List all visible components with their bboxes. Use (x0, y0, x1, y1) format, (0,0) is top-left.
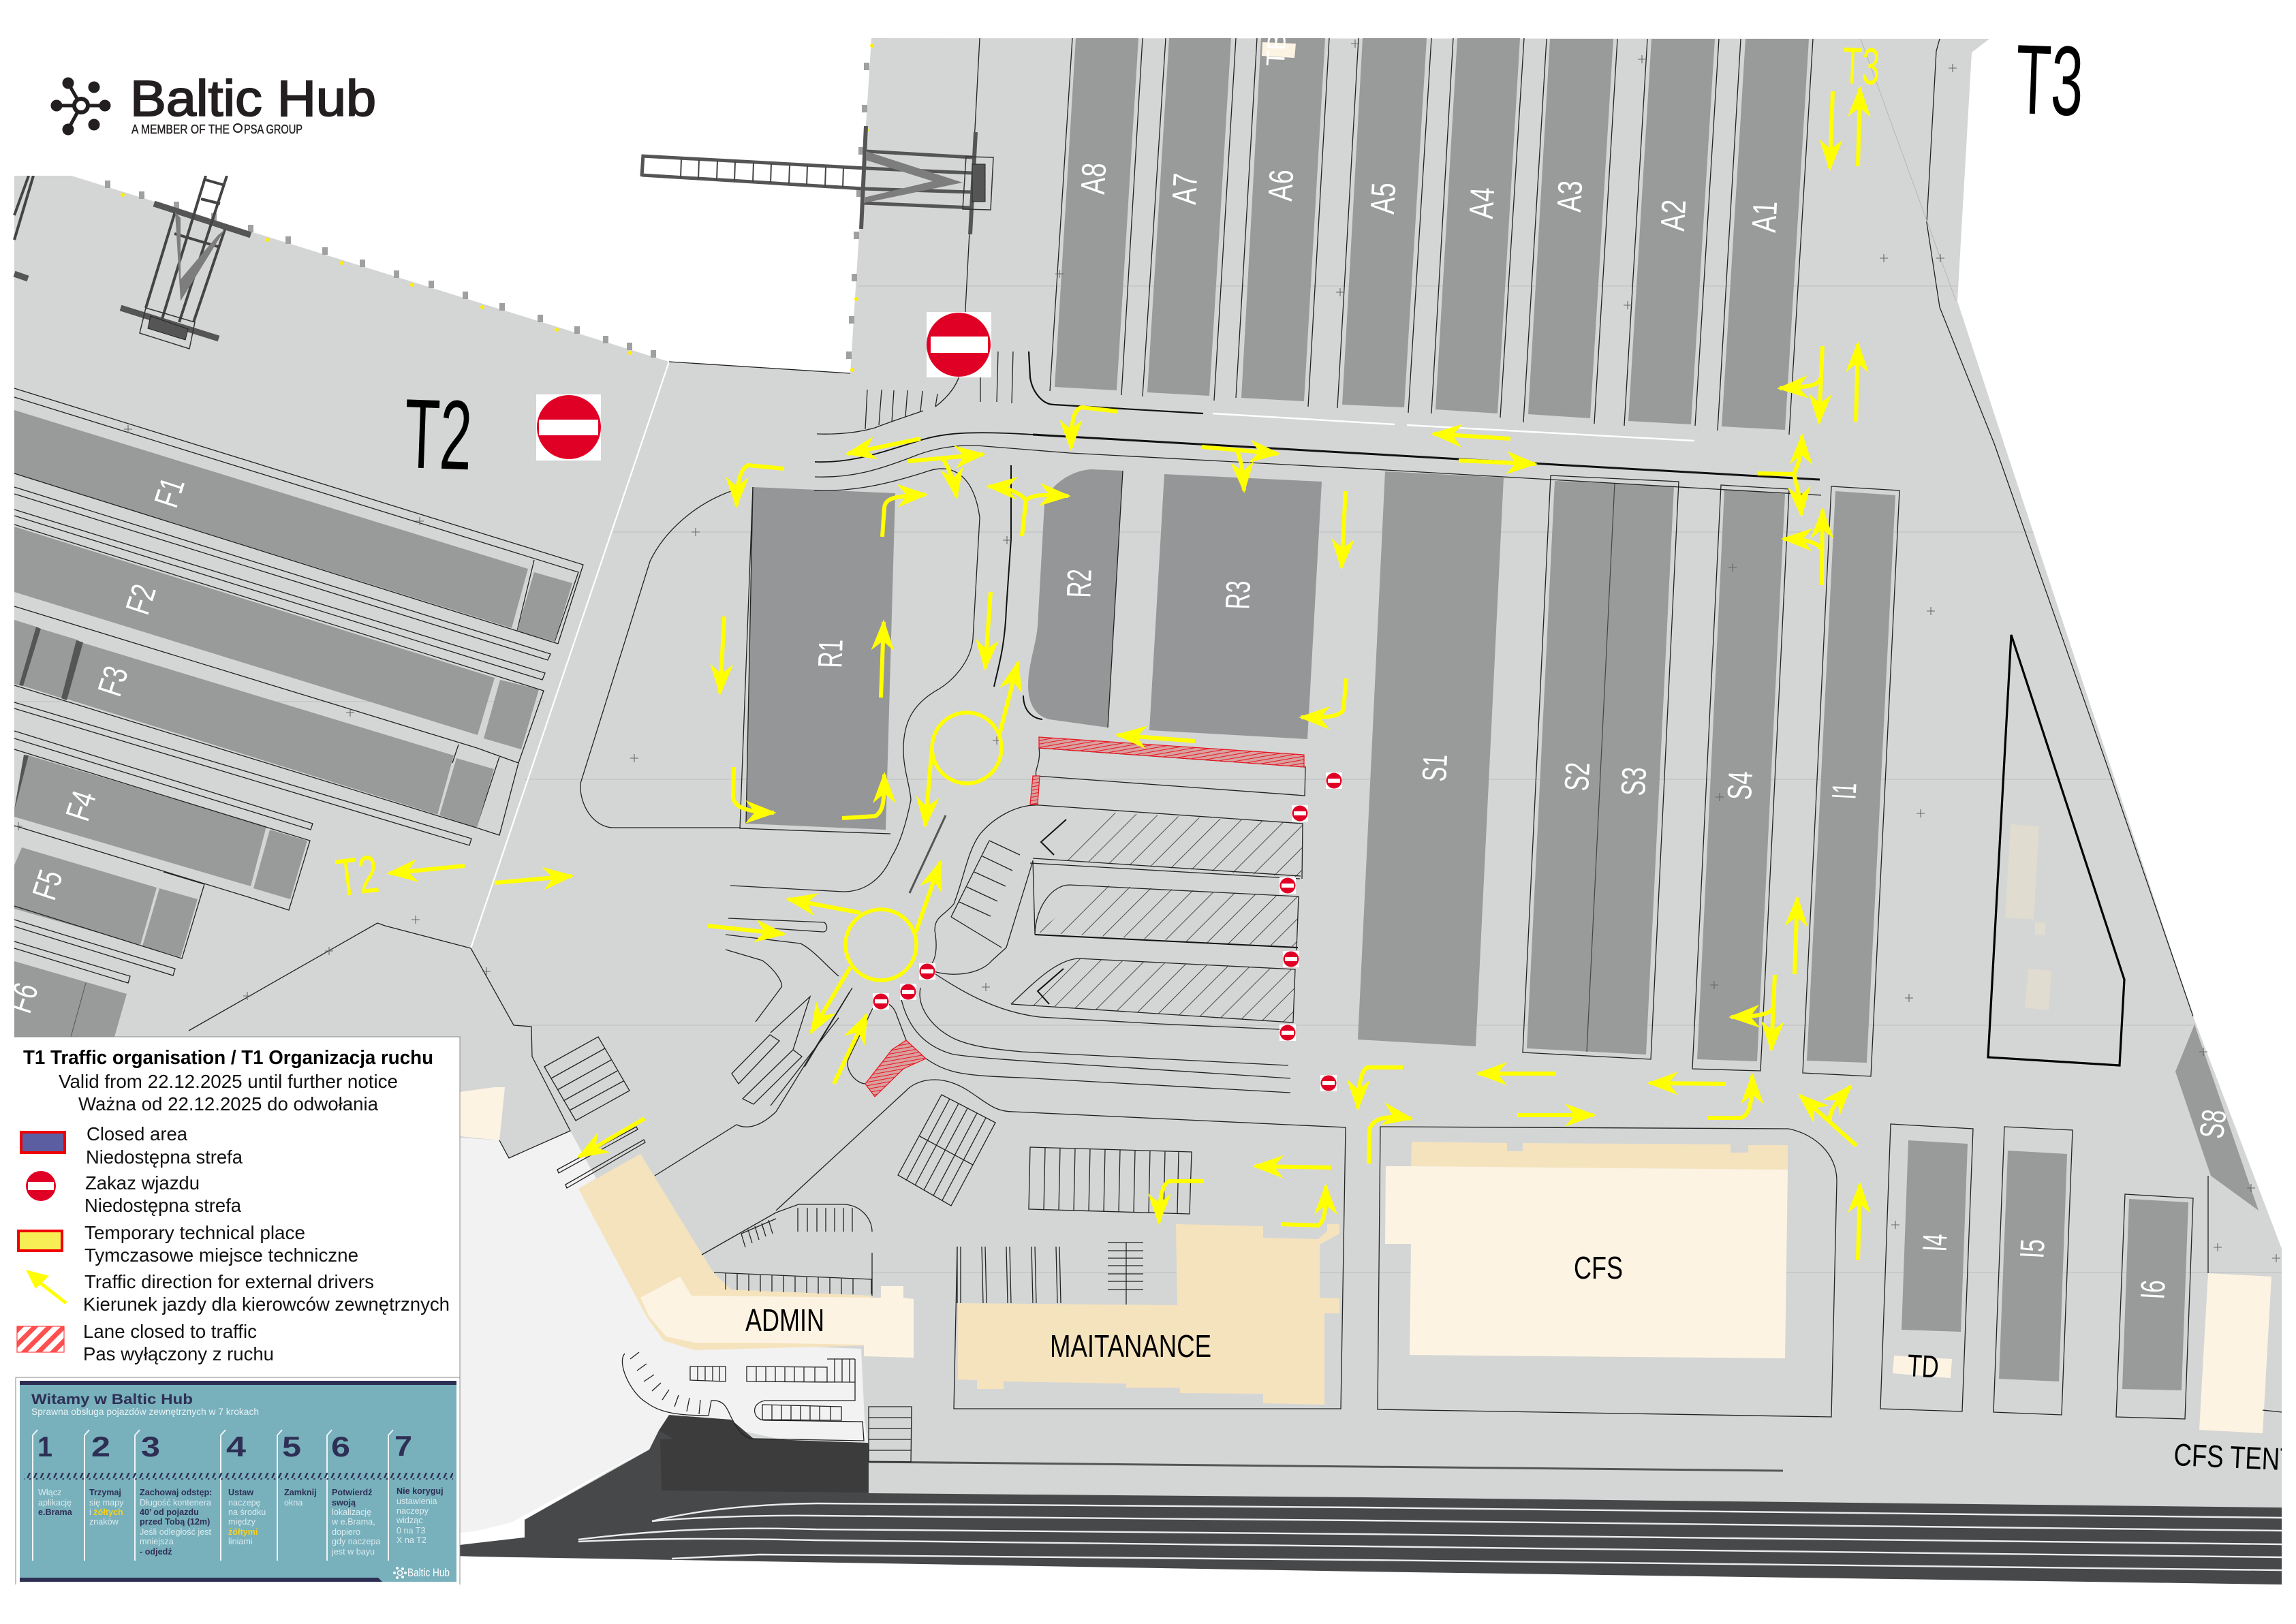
legend text: traffic direction: Traffic direction for external drivers (84, 1271, 374, 1292)
traffic direction arrows (389, 89, 1860, 1260)
block labels (1, 162, 2233, 1300)
TB marker: TB (1262, 33, 1292, 67)
terminal label T3: T3 (2014, 24, 2085, 136)
step numbers: 6 (331, 1431, 350, 1463)
building label CFS: CFS (1574, 1250, 1623, 1285)
rail yard (460, 1415, 2282, 1584)
block labels: F6 (1, 978, 46, 1017)
legend icon: no entry (26, 1171, 56, 1201)
terminal label T2: T2 (403, 378, 474, 490)
legend text: no entry: Zakaz wjazdu (85, 1172, 200, 1193)
tile seams (14, 286, 2282, 1272)
step 7 text: Nie koryguj (397, 1486, 444, 1496)
block labels: F1 (147, 473, 192, 512)
step 2 text: się mapy (89, 1498, 124, 1508)
step 3 text: 40’ od pojazdu (140, 1508, 199, 1517)
step dividers (33, 1430, 393, 1561)
block rows A (1050, 38, 1813, 435)
block labels: R2 (1059, 568, 1099, 598)
block labels: A2 (1654, 199, 1693, 232)
logo tagline: PSA GROUP (244, 123, 302, 136)
sign: quay no entry (927, 312, 991, 377)
roundabouts (846, 713, 1002, 980)
legend text: temporary technical place: Temporary technical place (84, 1222, 305, 1243)
block labels: F2 (119, 580, 164, 619)
legend text: no entry: Niedostępna strefa (84, 1195, 241, 1216)
step 2 text: i (89, 1508, 93, 1517)
step 6 text: w e.Brama, (331, 1517, 375, 1527)
block labels: S2 (1557, 762, 1597, 792)
step 4 text: na środku (228, 1508, 266, 1517)
step 4 text: liniami (228, 1537, 253, 1546)
step 4 text: Ustaw (228, 1488, 253, 1497)
legend text: lane closed: Lane closed to traffic (83, 1321, 257, 1342)
footer Baltic Hub logo: Baltic Hub (407, 1566, 450, 1579)
building: CFS top band (1411, 1142, 1788, 1170)
step numbers: 4 (226, 1431, 247, 1463)
yellow T3 label: T3 (1842, 37, 1880, 96)
step 6 text: dopiero (332, 1527, 360, 1537)
building: TD (1893, 1356, 1952, 1378)
block labels: I1 (1825, 782, 1864, 800)
block labels: R1 (811, 638, 850, 668)
crane: T1 quay (642, 126, 993, 234)
step 6 text: jest w bayu (331, 1547, 375, 1557)
logo tagline: A MEMBER OF THE (131, 123, 230, 136)
block labels: S3 (1614, 766, 1654, 797)
building: admin (640, 1277, 914, 1358)
small no entry signs (873, 772, 1342, 1091)
yellow T2 label: T2 (332, 843, 382, 908)
building: triangle sheds (2005, 824, 2051, 1010)
block labels: A1 (1745, 200, 1784, 234)
building: CFS tent (2199, 1273, 2271, 1433)
crane: T2 quay (14, 176, 251, 349)
legend panel (14, 1037, 460, 1585)
block labels: A7 (1165, 172, 1205, 206)
step 5 text: Zamknij (284, 1488, 317, 1497)
building: admin wing (578, 1154, 871, 1350)
quay bollards (105, 44, 874, 372)
logo tagline (131, 123, 302, 136)
step 3 text: Jeśli odległość jest (140, 1527, 212, 1537)
step 3 text: mniejsza (140, 1537, 174, 1546)
step 4 text: naczepę (228, 1498, 261, 1508)
step 7 text: naczepy (397, 1506, 429, 1516)
block labels: R3 (1218, 580, 1258, 610)
step 1 text: e.Brama (38, 1508, 73, 1517)
closed lanes hatched (865, 737, 1304, 1097)
block labels: A6 (1261, 169, 1301, 202)
step 1 text: Włącz (38, 1488, 61, 1497)
block labels: F5 (25, 865, 70, 904)
legend text: closed area: Niedostępna strefa (86, 1146, 243, 1168)
step numbers (37, 1430, 412, 1463)
legend icon: lane closed (17, 1326, 64, 1352)
step 3 text: Zachowaj odstęp: (140, 1488, 212, 1497)
sign: T2 no entry (536, 394, 601, 460)
step 1 text: aplikację (38, 1498, 72, 1508)
light poles (14, 40, 2280, 1262)
building label ADMIN: ADMIN (745, 1302, 824, 1338)
step 3 text: przed Tobą (12m) (140, 1517, 210, 1527)
step 2 text: znaków (89, 1517, 119, 1527)
legend text: lane closed: Pas wyłączony z ruchu (83, 1343, 274, 1364)
legend text: temporary technical place: Tymczasowe miejsce techniczne (84, 1245, 358, 1266)
legend text: closed area: Closed area (87, 1123, 187, 1144)
legend title: T1 Traffic organisation / T1 Organizacja ruchu (23, 1047, 433, 1069)
step 2 text: Trzymaj (89, 1488, 121, 1497)
block labels: F3 (91, 661, 136, 700)
block labels: I4 (1915, 1233, 1955, 1253)
triangle zone (1988, 635, 2124, 1065)
light apron area (460, 1131, 868, 1533)
no entry signs (536, 312, 1342, 1091)
step numbers: 2 (91, 1431, 110, 1463)
block rows S and I (1358, 471, 2259, 1419)
buildings (460, 824, 2271, 1433)
steps subtitle: Sprawna obsługa pojazdów zewnętrznych w 7 krokach (31, 1406, 259, 1417)
step 3 text: - odjedź (140, 1547, 172, 1557)
legend icon: closed area (21, 1132, 65, 1153)
step 6 text: swoją (332, 1498, 356, 1508)
step 4 text: między (228, 1517, 256, 1527)
building: maintenance (958, 1224, 1339, 1405)
building label TD: TD (1906, 1347, 1940, 1384)
step 3 text: Długość kontenera (140, 1498, 211, 1508)
block labels: S4 (1720, 770, 1760, 801)
building label MAITANANCE: MAITANANCE (1050, 1328, 1211, 1364)
step 7 text: X na T2 (397, 1535, 426, 1545)
block labels: A4 (1462, 187, 1502, 220)
legend validity EN: Valid from 22.12.2025 until further notice (59, 1071, 398, 1092)
step 6 text: Potwierdź (332, 1488, 372, 1497)
footer Baltic Hub logo (393, 1566, 450, 1579)
logo panel (14, 40, 412, 176)
legend validity PL: Ważna od 22.12.2025 do odwołania (78, 1093, 378, 1114)
white sliver (460, 1448, 649, 1545)
dashed road band (24, 1473, 453, 1480)
step 4 text: żółtymi (228, 1527, 258, 1537)
steps panel (20, 1381, 456, 1582)
step numbers: 1 (37, 1431, 52, 1463)
block labels: A8 (1074, 162, 1113, 196)
icon: Baltic Hub mark (51, 78, 110, 135)
block labels: S8 (2192, 1108, 2233, 1140)
step 7 text: widząc (396, 1516, 422, 1525)
step 7 text: 0 na T3 (397, 1526, 425, 1535)
building: terminal gate beige (460, 1087, 505, 1140)
block rows F (14, 388, 583, 1037)
block labels: I5 (2013, 1238, 2052, 1260)
block labels: S1 (1415, 753, 1455, 783)
block rows R (746, 469, 1322, 830)
building: CFS (1385, 1166, 1788, 1358)
logo wordmark: Baltic Hub (130, 70, 376, 127)
legend icon: traffic arrow (26, 1270, 66, 1303)
step 5 text: okna (284, 1498, 302, 1508)
step 6 text: gdy naczepa (332, 1537, 380, 1546)
block labels: I6 (2133, 1279, 2173, 1300)
parking bays (544, 812, 1303, 1462)
block labels: F4 (59, 786, 104, 825)
block labels: A5 (1363, 182, 1403, 215)
legend text: traffic direction: Kierunek jazdy dla kierowców zewnętrznych (83, 1294, 450, 1315)
step 2 text: żółtych (93, 1508, 123, 1517)
step numbers: 5 (282, 1431, 301, 1463)
steps title: Witamy w Baltic Hub (31, 1392, 193, 1407)
step 6 text: lokalizację (332, 1508, 371, 1517)
step numbers: 7 (394, 1430, 412, 1462)
legend icon: temporary technical place (18, 1231, 62, 1251)
step 7 text: ustawienia (397, 1497, 437, 1506)
step numbers: 3 (141, 1431, 160, 1463)
block labels: A3 (1550, 180, 1589, 213)
